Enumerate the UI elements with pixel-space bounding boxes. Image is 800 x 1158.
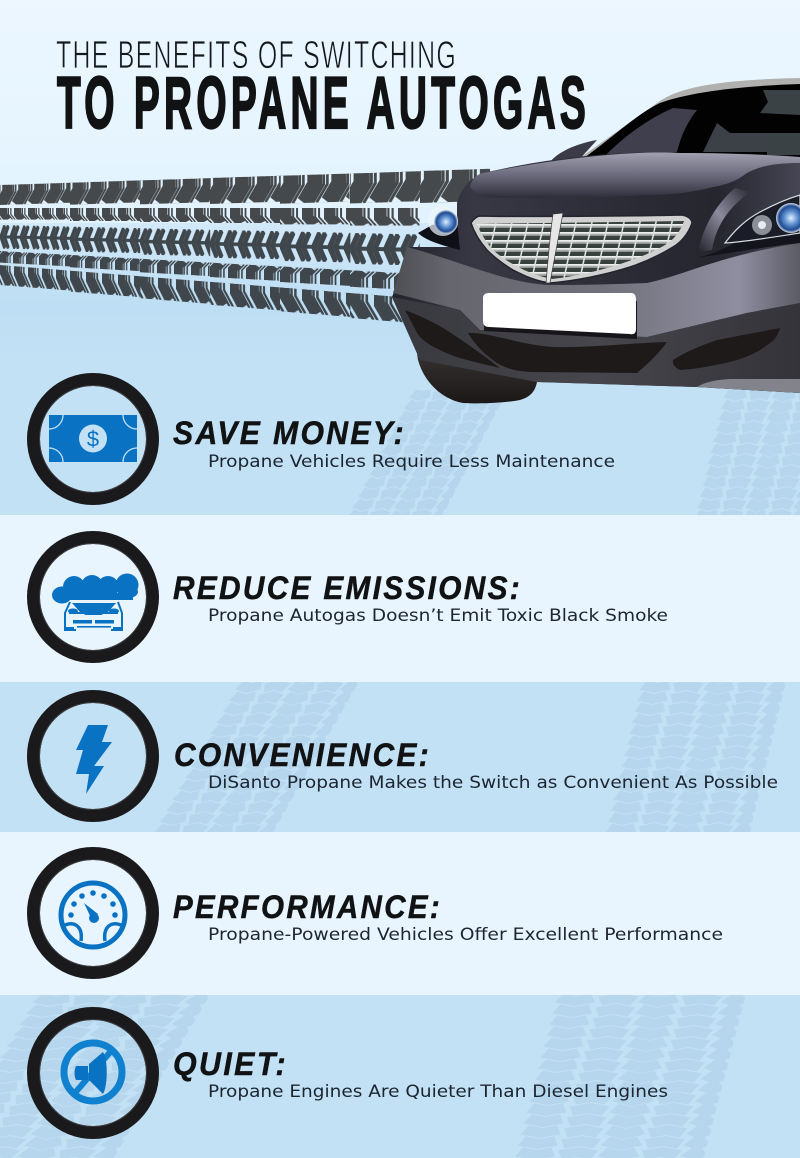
text: save money: Propane Vehicles Require Less Maintenance [208, 452, 615, 472]
icon: banknote [49, 415, 137, 462]
row: reduce emissions [34, 538, 668, 656]
row: save money [34, 380, 615, 498]
text: performance: Propane-Powered Vehicles Offer Excellent Performance [208, 925, 723, 945]
icon: car with cloud [52, 574, 138, 630]
number plate [483, 293, 637, 339]
heading: performance: PERFORMANCE: [173, 889, 442, 925]
heading: reduce emissions: REDUCE EMISSIONS: [173, 570, 522, 606]
heading: convenience: CONVENIENCE: [174, 737, 431, 773]
car roof and windshield [550, 78, 800, 163]
text: convenience: DiSanto Propane Makes the Switch as Convenient As Possible [208, 773, 778, 793]
tyre ring icon [34, 854, 152, 972]
car grille [471, 213, 692, 283]
car bumper [393, 243, 800, 337]
heading: quiet: QUIET: [173, 1046, 288, 1082]
dark tyre tracks [0, 169, 490, 324]
icon: muted speaker [64, 1043, 122, 1101]
text: reduce emissions: Propane Autogas Doesn’t Emit Toxic Black Smoke [208, 606, 668, 626]
row: quiet [34, 1014, 668, 1132]
title: THE BENEFITS OF SWITCHING [56, 34, 457, 77]
row: convenience [34, 696, 778, 816]
title [56, 34, 590, 144]
tyre ring icon [34, 1014, 152, 1132]
row: performance [34, 854, 723, 972]
right headlight [697, 195, 800, 258]
tyre ring icon [34, 380, 152, 498]
car lower bumper [392, 297, 800, 393]
tyre ring icon [34, 538, 152, 656]
icon: banknote: $ [87, 426, 99, 452]
car hood [470, 153, 800, 198]
car body [392, 152, 800, 393]
heading: save money: SAVE MONEY: [173, 415, 406, 451]
car illustration [392, 78, 800, 403]
tyre ring icon [34, 696, 152, 816]
text: quiet: Propane Engines Are Quieter Than Diesel Engines [208, 1082, 668, 1102]
hood highlight [698, 188, 750, 252]
icon: speedometer [61, 883, 125, 947]
car air intakes [405, 310, 780, 373]
icon: lightning bolt [76, 725, 112, 794]
car tyre [415, 340, 545, 403]
faint tyre tracks [0, 390, 800, 1158]
lower sill [697, 379, 800, 393]
left headlight [418, 206, 460, 250]
